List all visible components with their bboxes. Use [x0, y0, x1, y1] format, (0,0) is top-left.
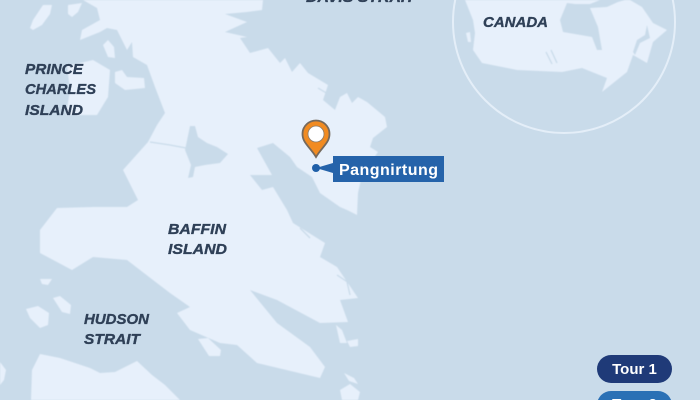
- small islands: [0, 3, 360, 400]
- label: Hudson Strait: [84, 311, 150, 348]
- fjords: southeast coast: [300, 88, 358, 295]
- river: [150, 142, 186, 148]
- label: Prince Charles Island: CHARLES: [25, 81, 96, 98]
- land and water shapes: [0, 0, 387, 400]
- icon: map pin: [302, 120, 330, 157]
- inset land shapes: [465, 0, 667, 92]
- label: Hudson Strait: STRAIT: [84, 331, 142, 348]
- label: Canada: CANADA: [483, 14, 548, 31]
- label: Hudson Strait: HUDSON: [84, 311, 150, 328]
- label: Baffin Island: ISLAND: [168, 241, 227, 258]
- landmass: Baffin Island: [40, 0, 387, 378]
- Gulf of St Lawrence: [633, 25, 650, 55]
- label: Prince Charles Island: [25, 61, 96, 119]
- Great Lakes outline: [546, 50, 557, 64]
- Vancouver Island: [466, 32, 471, 42]
- label: Baffin Island: BAFFIN: [168, 221, 227, 238]
- label: Prince Charles Island: ISLAND: [25, 102, 83, 119]
- landmass: Quebec north coast: [31, 354, 180, 400]
- button: Tour 2: [597, 391, 672, 400]
- Canada landmass: [465, 0, 667, 92]
- callout: Pangnirtung: [312, 156, 444, 182]
- button: Tour 1: Tour 1: [612, 361, 657, 378]
- label: Baffin Island: [168, 221, 227, 258]
- inset circle: [453, 0, 675, 133]
- inset: Canada locator: [453, 0, 675, 133]
- lake: Nettilling: [185, 126, 228, 178]
- label: Prince Charles Island: PRINCE: [25, 61, 84, 78]
- island: Prince Charles Island: [66, 60, 110, 115]
- Hudson Bay: [560, 0, 625, 50]
- button: Tour 1: [597, 355, 672, 383]
- callout: Pangnirtung: Pangnirtung: [339, 162, 438, 179]
